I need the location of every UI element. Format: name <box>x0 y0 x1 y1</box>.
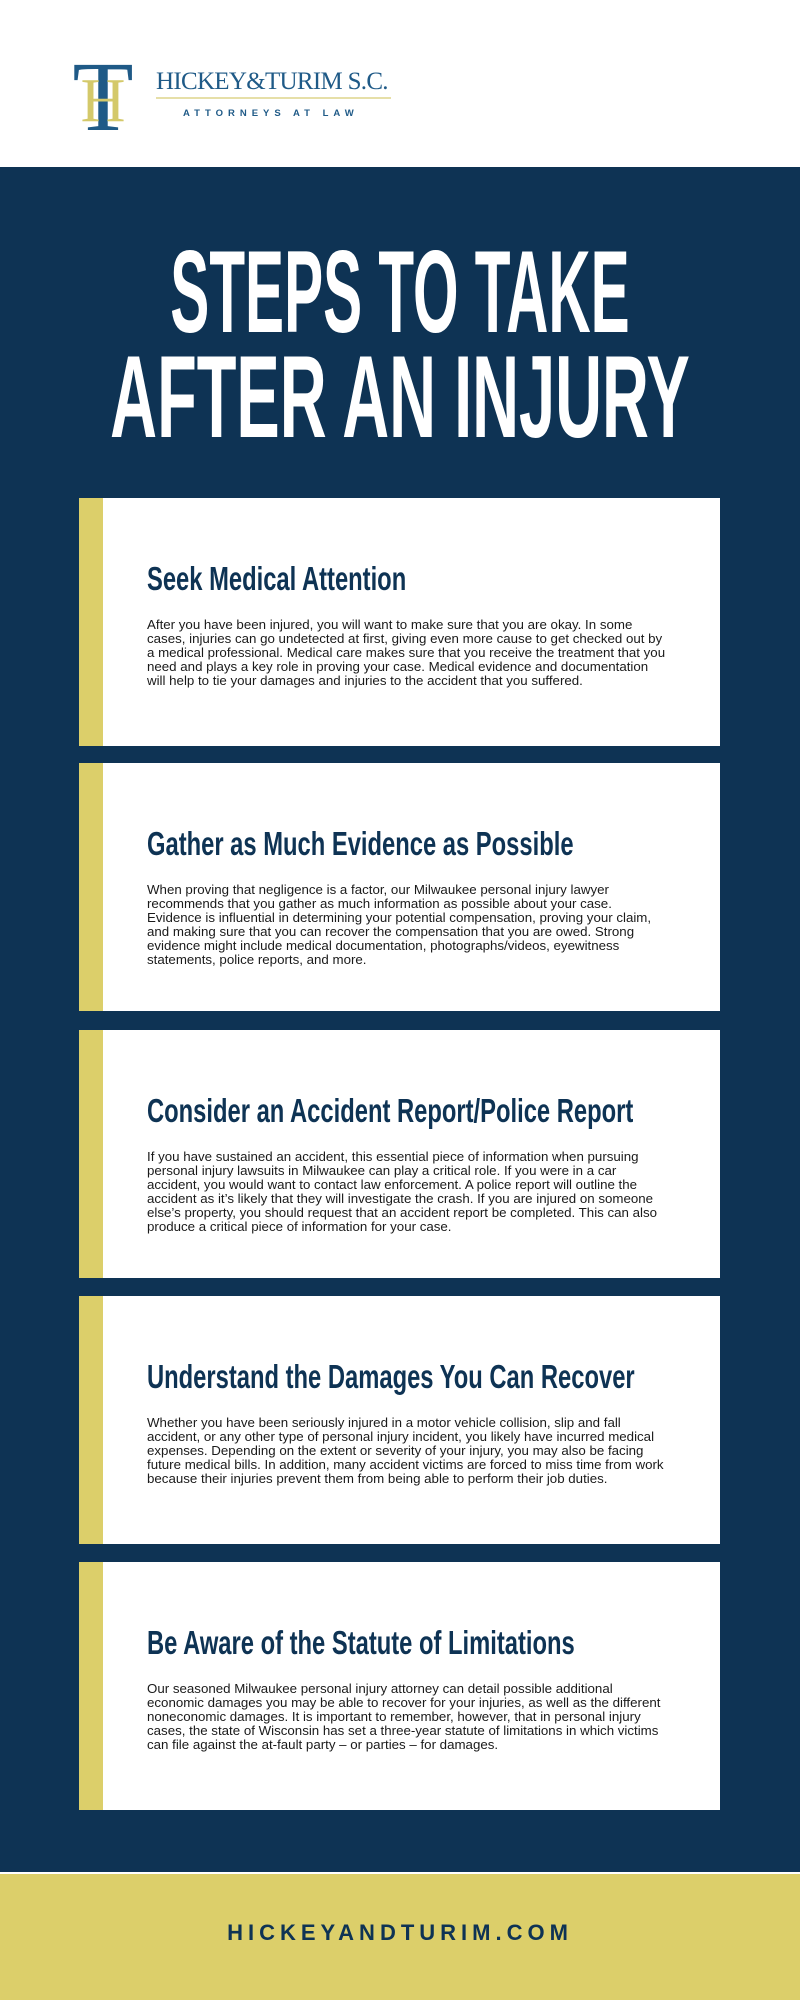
panel: seek medical attention <box>79 498 720 746</box>
text block: recommends that you gather as much information as possible about your case. <box>147 896 612 911</box>
text block <box>147 882 651 967</box>
heading: Be Aware of the Statute of Limitations <box>147 1624 575 1661</box>
text block: After you have been injured, you will want to make sure that you are okay. In some <box>147 617 632 632</box>
text block: and making sure that you can recover the compensation that you are owed. Strong <box>147 924 634 939</box>
logo <box>72 56 391 134</box>
text block: accident as it’s likely that they will investigate the crash. If you are injured on someone <box>147 1191 653 1206</box>
text block: will help to tie your damages and injuries to the accident that you suffered. <box>147 673 583 688</box>
text block: produce a critical piece of information for your case. <box>147 1219 452 1234</box>
text block <box>147 1681 660 1752</box>
title: STEPS TO TAKE <box>170 226 630 357</box>
panel: accident report <box>79 1030 720 1278</box>
heading: Consider an Accident Report/Police Report <box>147 1092 633 1129</box>
text block: need and plays a key role in proving your case. Medical evidence and documentation <box>147 659 648 674</box>
text block: statements, police reports, and more. <box>147 952 367 967</box>
text block <box>147 1415 664 1486</box>
firm name: HICKEY&TURIM S.C. <box>156 68 388 95</box>
panel: damages <box>79 1296 720 1544</box>
text block: Whether you have been seriously injured in a motor vehicle collision, slip and fall <box>147 1415 621 1430</box>
text block: expenses. Depending on the extent or severity of your injury, you may also be facing <box>147 1443 643 1458</box>
header <box>0 0 800 167</box>
text block: personal injury lawsuits in Milwaukee can play a critical role. If you were in a car <box>147 1163 616 1178</box>
text block: accident, you would want to contact law enforcement. A police report will outline the <box>147 1177 637 1192</box>
text block: noneconomic damages. It is important to remember, however, that in personal injury <box>147 1709 641 1724</box>
title: AFTER AN INJURY <box>110 331 690 462</box>
text block: accident, or any other type of personal injury incident, you likely have incurred medical <box>147 1429 654 1444</box>
title <box>110 226 690 462</box>
text block: Our seasoned Milwaukee personal injury attorney can detail possible additional <box>147 1681 613 1696</box>
text block <box>147 617 665 688</box>
text block: When proving that negligence is a factor, our Milwaukee personal injury lawyer <box>147 882 609 897</box>
icon: TH monogram: H <box>81 67 125 134</box>
text block: economic damages you may be able to recover for your injuries, as well as the different <box>147 1695 660 1710</box>
panel: statute of limitations <box>79 1562 720 1810</box>
tagline: ATTORNEYS AT LAW <box>183 108 359 119</box>
text block: If you have sustained an accident, this essential piece of information when pursuing <box>147 1149 639 1164</box>
heading: Seek Medical Attention <box>147 560 406 597</box>
text block: cases, injuries can go undetected at first, giving even more cause to get checked out by <box>147 631 662 646</box>
footer <box>0 1872 800 2000</box>
panel: gather evidence <box>79 763 720 1011</box>
text block: evidence might include medical documentation, photographs/videos, eyewitness <box>147 938 619 953</box>
text block: because their injuries prevent them from being able to perform their job duties. <box>147 1471 607 1486</box>
heading: Gather as Much Evidence as Possible <box>147 825 574 862</box>
text block: cases, the state of Wisconsin has set a three-year statute of limitations in which victims <box>147 1723 658 1738</box>
text block <box>147 1149 657 1234</box>
website url: HICKEYANDTURIM.COM <box>227 1920 573 1945</box>
text block: else’s property, you should request that an accident report be completed. This can also <box>147 1205 657 1220</box>
heading: Understand the Damages You Can Recover <box>147 1358 635 1395</box>
text block: a medical professional. Medical care makes sure that you receive the treatment that you <box>147 645 665 660</box>
text block: can file against the at-fault party – or parties – for damages. <box>147 1737 498 1752</box>
text block: future medical bills. In addition, many accident victims are forced to miss time from work <box>147 1457 664 1472</box>
text block: Evidence is influential in determining your potential compensation, proving your claim, <box>147 910 651 925</box>
